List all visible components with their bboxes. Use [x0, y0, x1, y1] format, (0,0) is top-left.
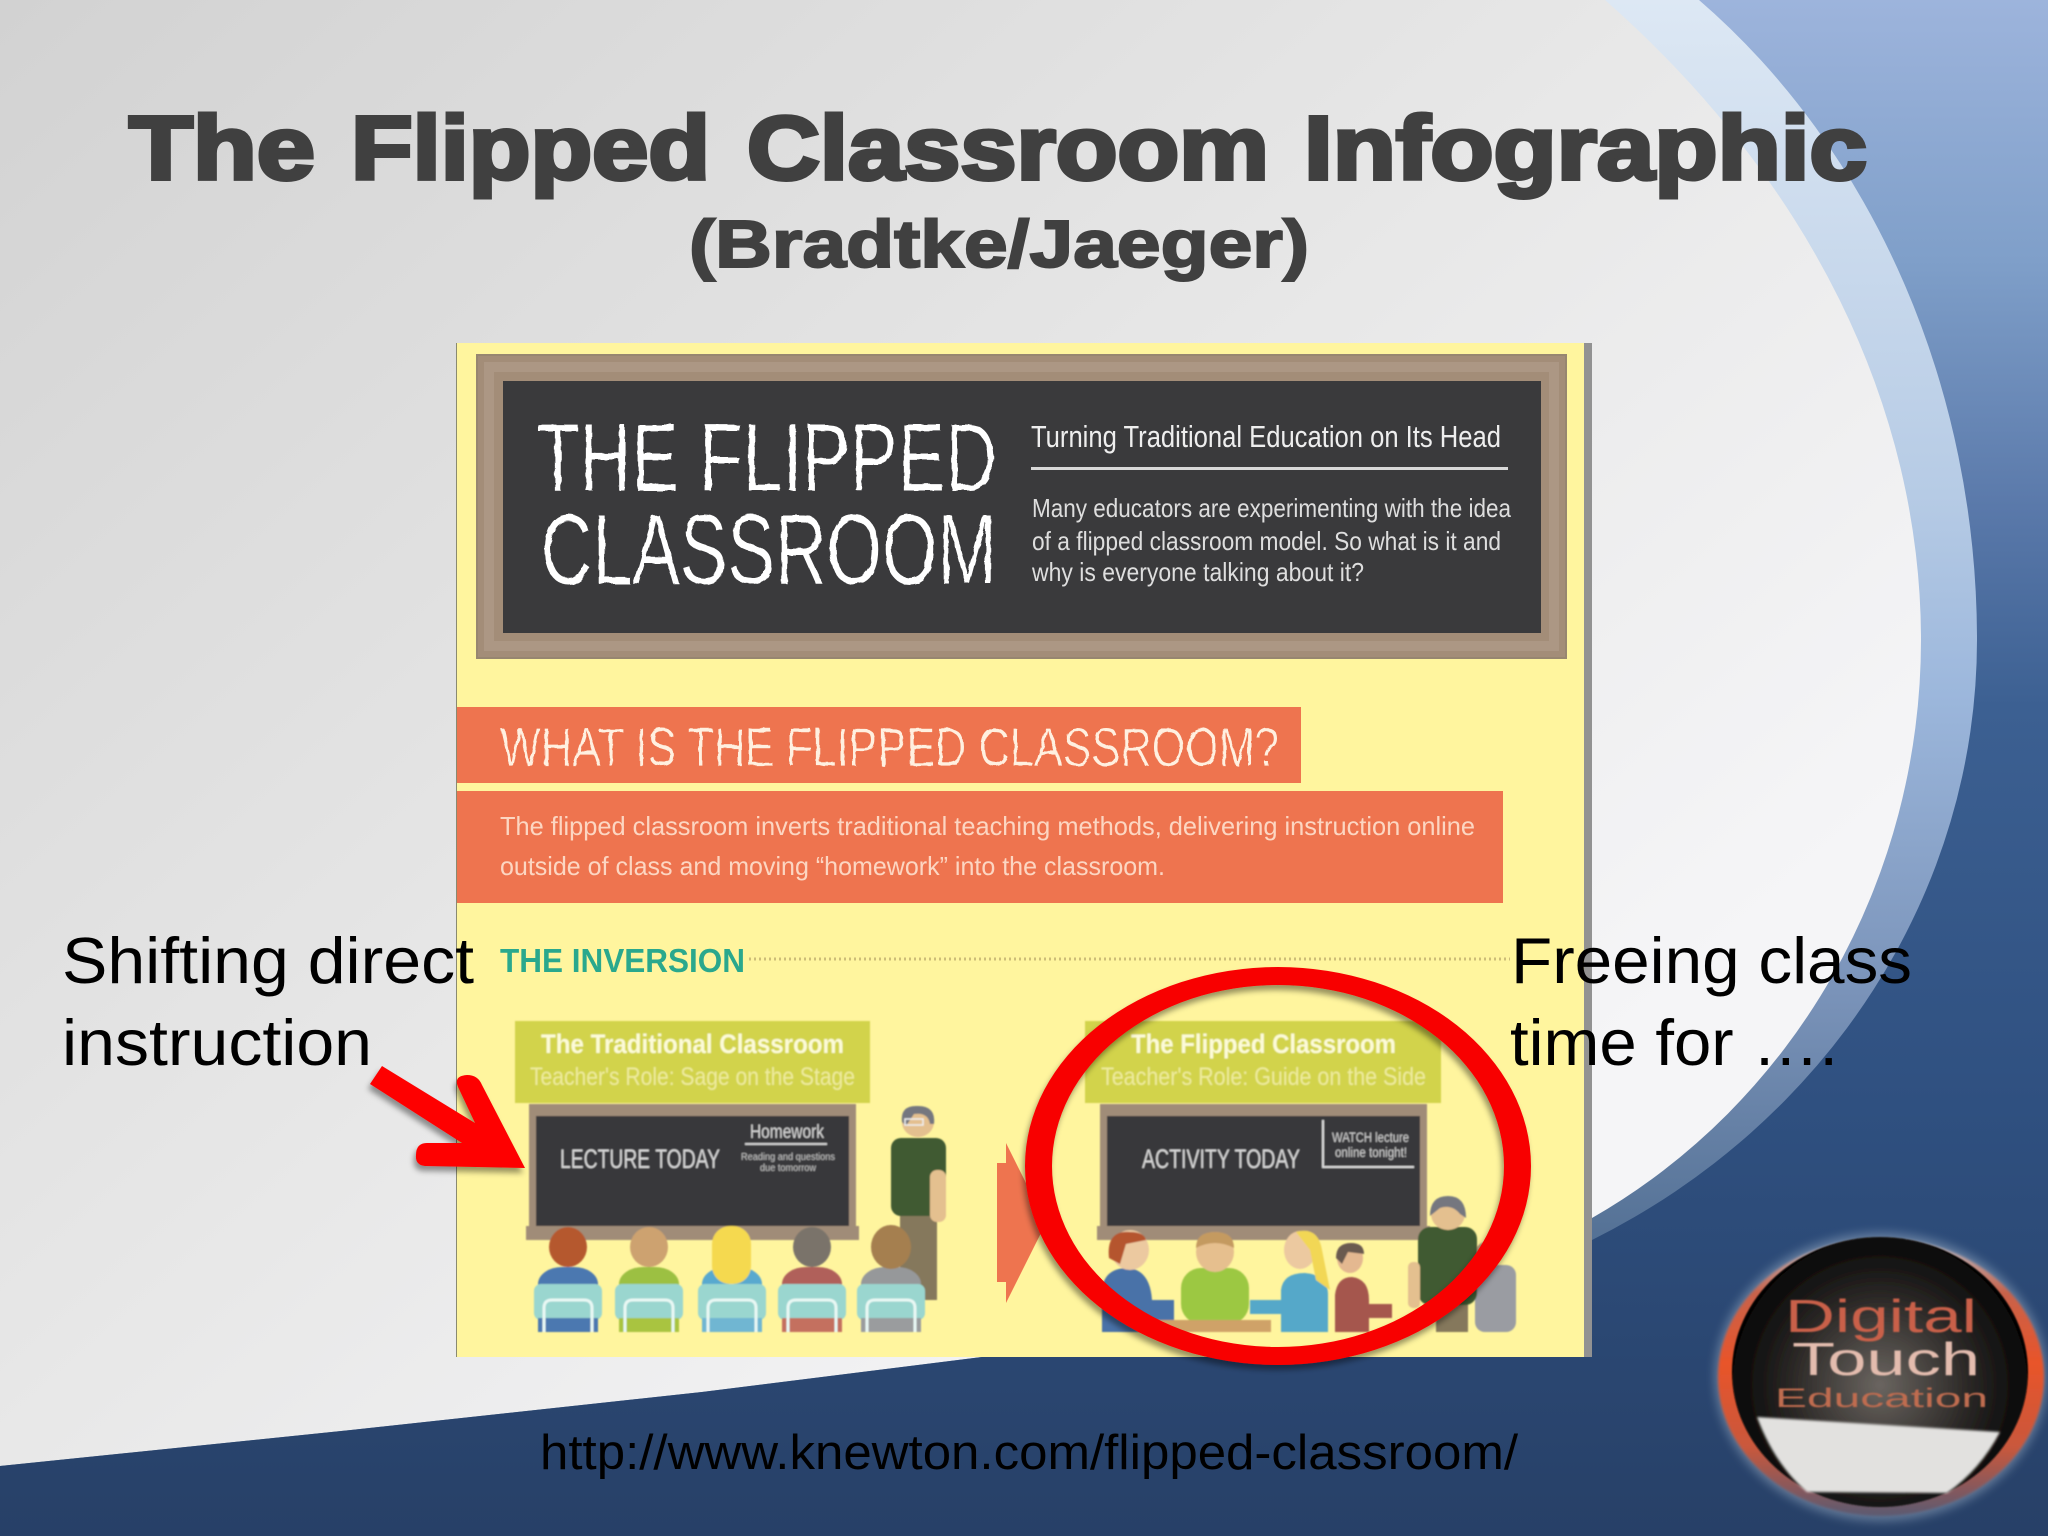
title	[129, 99, 1867, 199]
definition text bar: outside of class and moving “homework” into the classroom.	[500, 851, 1165, 881]
title: The	[129, 99, 315, 199]
logo: digital touch education	[1715, 1233, 2047, 1521]
student 2	[615, 1227, 683, 1332]
traditional label: The Traditional Classroom	[541, 1029, 844, 1059]
flipped label	[1085, 1021, 1441, 1103]
orange transition arrow	[997, 1143, 1046, 1303]
lecture blackboard: Reading and questions	[741, 1152, 835, 1163]
red pointer arrow	[370, 1066, 525, 1168]
chalkboard header	[477, 355, 1566, 658]
logo orange ring	[1718, 1238, 2044, 1516]
chalk rule	[1031, 467, 1508, 470]
flipped label: The Flipped Classroom	[1131, 1029, 1396, 1059]
lecture blackboard: due tomorrow	[760, 1163, 817, 1174]
logo halo	[1715, 1233, 2047, 1521]
title: Infographic	[1304, 99, 1867, 199]
logo white panel	[1757, 1417, 2000, 1493]
title: Classroom	[747, 99, 1269, 199]
definition text bar: The flipped classroom inverts traditional teaching methods, delivering instruction online	[500, 811, 1475, 841]
board frame	[477, 355, 1566, 658]
lecture blackboard	[526, 1104, 859, 1240]
chalk title line one: THE FLIPPED	[536, 403, 997, 512]
the inversion subheading: THE INVERSION	[500, 942, 745, 979]
activity blackboard: WATCH lecture	[1332, 1129, 1409, 1145]
logo black disc	[1732, 1237, 2028, 1507]
chalk intro paragraph: of a flipped classroom model. So what is it and	[1032, 526, 1501, 556]
lecture blackboard: Homework	[750, 1122, 824, 1143]
panel left edge	[456, 343, 457, 1357]
teacher standing	[891, 1106, 946, 1300]
gray student background	[1474, 1242, 1516, 1332]
chalk tagline: Turning Traditional Education on Its Head	[1031, 419, 1501, 454]
definition text bar	[457, 791, 1503, 903]
right annotation: freeing class time: Freeing class	[1511, 924, 1912, 997]
blue student	[1102, 1230, 1174, 1332]
activity blackboard: online tonight!	[1335, 1144, 1407, 1160]
activity blackboard: ACTIVITY TODAY	[1142, 1144, 1300, 1174]
panel background	[456, 343, 1586, 1357]
activity blackboard	[1097, 1104, 1430, 1240]
left annotation: shifting direct instruction	[62, 924, 474, 1079]
right annotation: freeing class time: time for ….	[1510, 1006, 1838, 1079]
subtitle: (Bradtke/Jaeger)	[689, 207, 1309, 282]
panel right edge	[1584, 343, 1592, 1357]
traditional label	[515, 1021, 870, 1103]
student 1	[534, 1227, 602, 1332]
board surface	[503, 381, 1541, 633]
right annotation: freeing class time	[1510, 924, 1912, 1079]
teacher guiding	[1408, 1196, 1477, 1332]
left annotation: shifting direct instruction: Shifting direct	[62, 924, 474, 997]
source url: http://www.knewton.com/flipped-classroom/	[540, 1426, 1518, 1480]
lecture blackboard: LECTURE TODAY	[560, 1144, 720, 1174]
table	[1147, 1320, 1271, 1332]
student 5	[857, 1225, 925, 1332]
board frame highlight	[489, 367, 1554, 646]
traditional label: Teacher's Role: Sage on the Stage	[530, 1063, 855, 1091]
blonde student	[1250, 1231, 1330, 1332]
chalk intro paragraph: why is everyone talking about it?	[1031, 557, 1364, 587]
left annotation: shifting direct instruction: instruction	[62, 1006, 372, 1079]
student 3	[698, 1226, 766, 1332]
title: Flipped	[351, 99, 710, 199]
logo word digital: Digital	[1785, 1290, 1977, 1342]
logo word touch: Touch	[1792, 1333, 1980, 1385]
chalk title line two: CLASSROOM	[541, 494, 997, 606]
section heading bar: WHAT IS THE FLIPPED CLASSROOM?	[500, 716, 1279, 778]
collaborating students	[1102, 1196, 1516, 1332]
flipped label: Teacher's Role: Guide on the Side	[1101, 1063, 1426, 1091]
chalk intro paragraph	[1031, 493, 1511, 587]
chalk intro paragraph: Many educators are experimenting with the idea	[1032, 493, 1511, 523]
section heading bar	[457, 707, 1301, 783]
brown student	[1335, 1243, 1392, 1332]
students seated row	[534, 1225, 925, 1332]
embedded infographic panel	[456, 343, 1592, 1357]
logo word education: Education	[1775, 1383, 1988, 1413]
traditional classroom illustration	[515, 1021, 946, 1332]
student 4	[778, 1227, 846, 1332]
flipped classroom illustration	[1085, 1021, 1516, 1332]
red highlight ellipse	[1025, 967, 1531, 1365]
green student	[1181, 1232, 1249, 1324]
